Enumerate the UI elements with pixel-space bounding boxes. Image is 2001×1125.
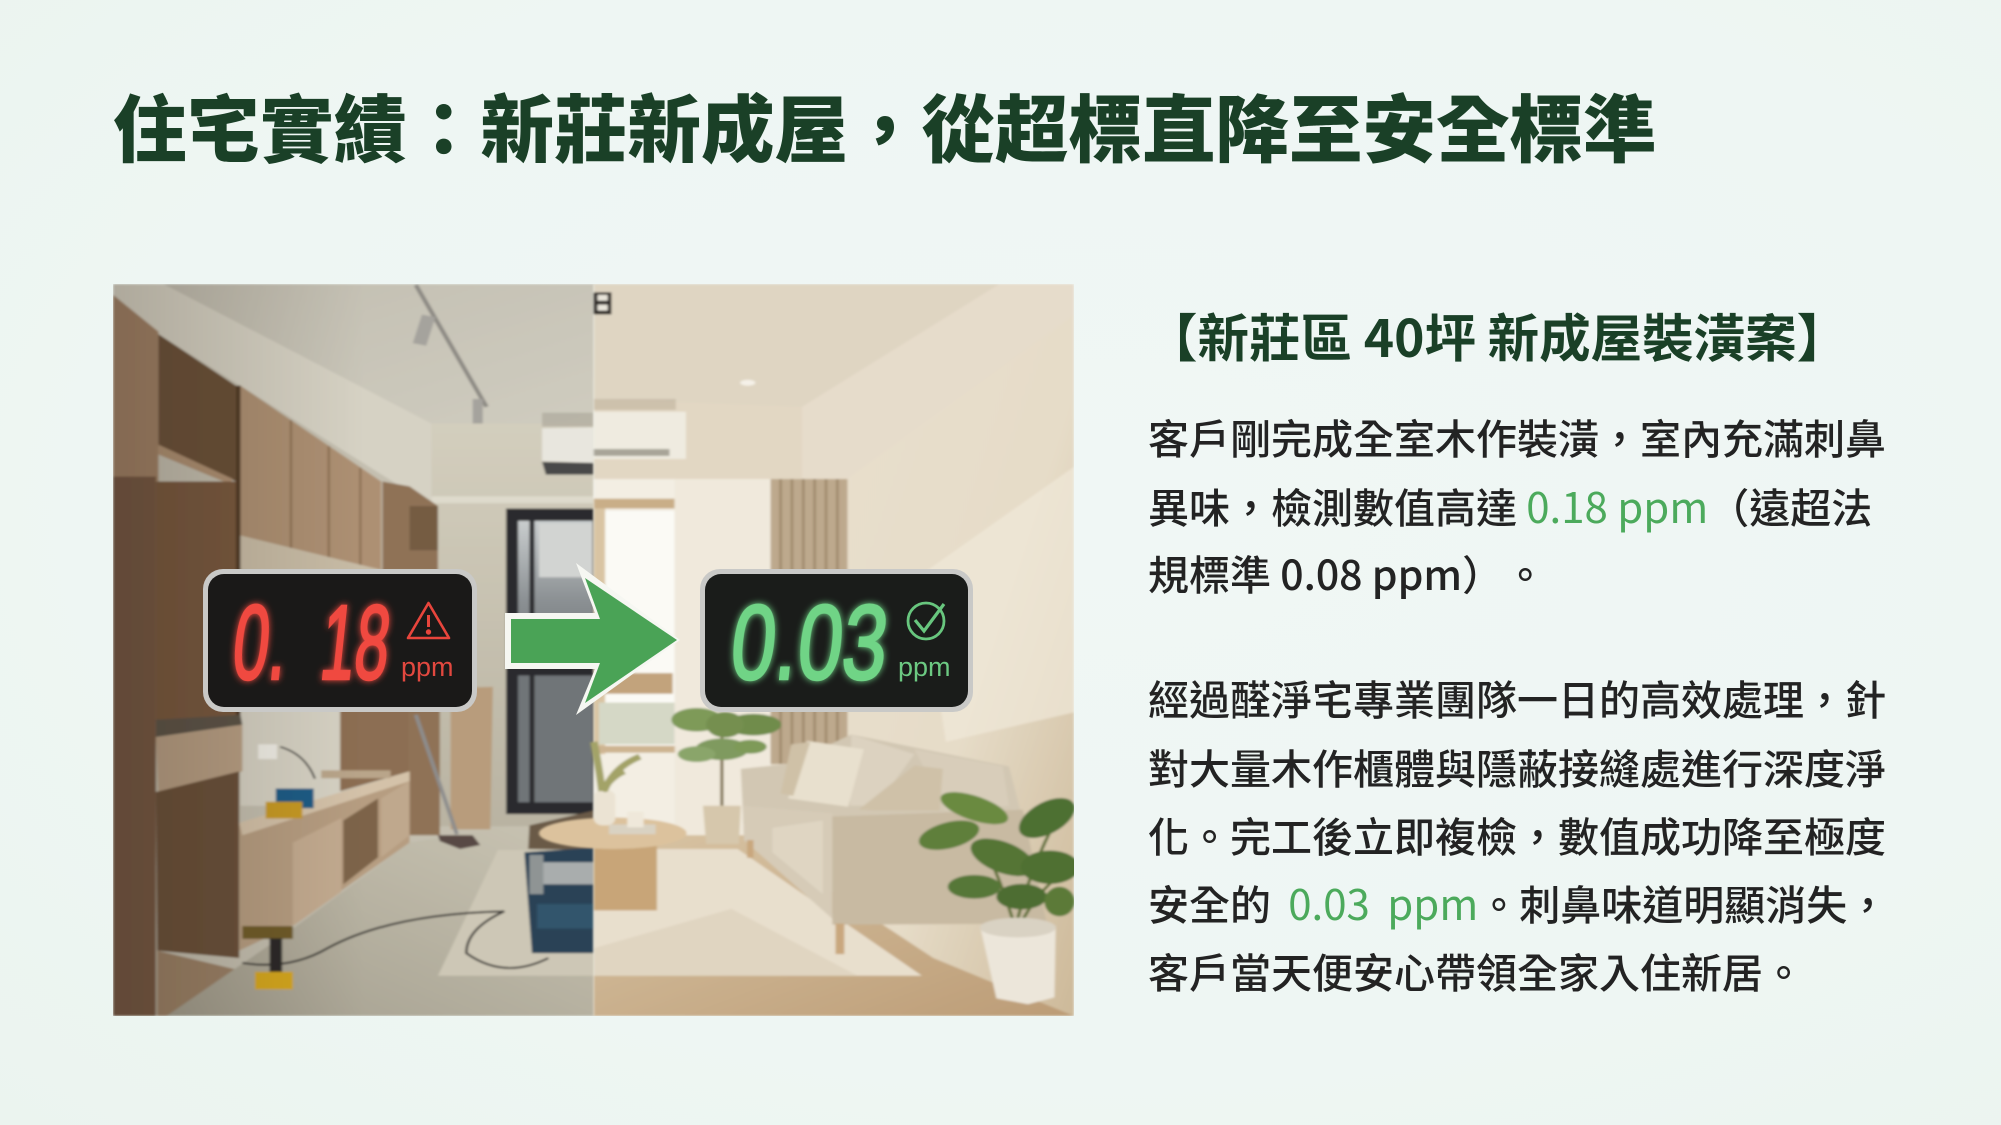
text block: after treatment: 化。完工後立即複檢，數值成功降至極度 — [1148, 804, 1886, 864]
unit: ppm — [898, 652, 951, 682]
AC — [542, 427, 594, 463]
icon: check circle — [908, 603, 944, 639]
mid wall — [240, 707, 341, 806]
title: 住宅實績：新莊新成屋，從超標直降至安全標準 — [113, 72, 1656, 178]
photo: before side, construction site — [113, 284, 594, 1016]
unit: ppm — [401, 652, 454, 682]
text block: before treatment — [1148, 406, 1886, 602]
upper niche — [158, 334, 236, 481]
upper cabinets — [240, 386, 381, 570]
shelf blocks — [156, 725, 242, 792]
digits: 0.03: 0.03 — [726, 583, 894, 702]
digits: 18: 18 — [316, 583, 396, 702]
floor — [167, 826, 594, 1016]
text block: before treatment: 客戶剛完成全室木作裝潢，室內充滿刺鼻 — [1148, 406, 1886, 466]
text block: after treatment: 安全的 0.03 ppm。刺鼻味道明顯消失， — [1148, 872, 1888, 933]
text block: after treatment: 經過醛淨宅專業團隊一日的高效處理，針 — [1148, 667, 1886, 727]
TV cabinet — [239, 771, 410, 951]
left tall column — [113, 295, 158, 481]
mat — [438, 850, 594, 976]
heading: case name: 【新莊區 40坪 新成屋裝潢案】 — [1146, 297, 1848, 372]
machine — [528, 811, 594, 850]
text block: before treatment: 異味，檢測數值高達 0.18 ppm（遠超法 — [1148, 475, 1872, 536]
arrow: green transition arrow — [505, 563, 680, 715]
text block: before treatment: 規標準 0.08 ppm） 。 — [1148, 542, 1546, 602]
round table — [594, 843, 657, 910]
board and mop — [451, 687, 493, 829]
AC — [594, 412, 686, 459]
badge: after reading 0.03 ppm — [700, 569, 973, 712]
photo: after side, finished living room — [539, 284, 1084, 1016]
drill — [242, 926, 293, 939]
floor and rug — [594, 835, 1074, 1016]
digits: 0.: 0. — [228, 583, 294, 702]
text block: after treatment: 對大量木作櫃體與隱蔽接縫處進行深度淨 — [1148, 736, 1886, 796]
sofa — [741, 734, 1022, 835]
dried plant — [594, 742, 640, 791]
window light — [594, 479, 770, 838]
socket and tools — [258, 744, 277, 759]
text block: after treatment: 客戶當天便安心帶領全家入住新居。 — [1148, 940, 1804, 1000]
curtain — [770, 479, 847, 764]
cable — [242, 911, 548, 968]
badge: before reading 0.18 ppm — [203, 569, 477, 712]
track light — [416, 285, 487, 407]
large plant — [984, 825, 1066, 929]
window — [506, 509, 594, 814]
mid plant — [719, 737, 724, 806]
icon: warning triangle — [408, 603, 449, 638]
panel: before and after room photo — [113, 284, 1074, 1016]
